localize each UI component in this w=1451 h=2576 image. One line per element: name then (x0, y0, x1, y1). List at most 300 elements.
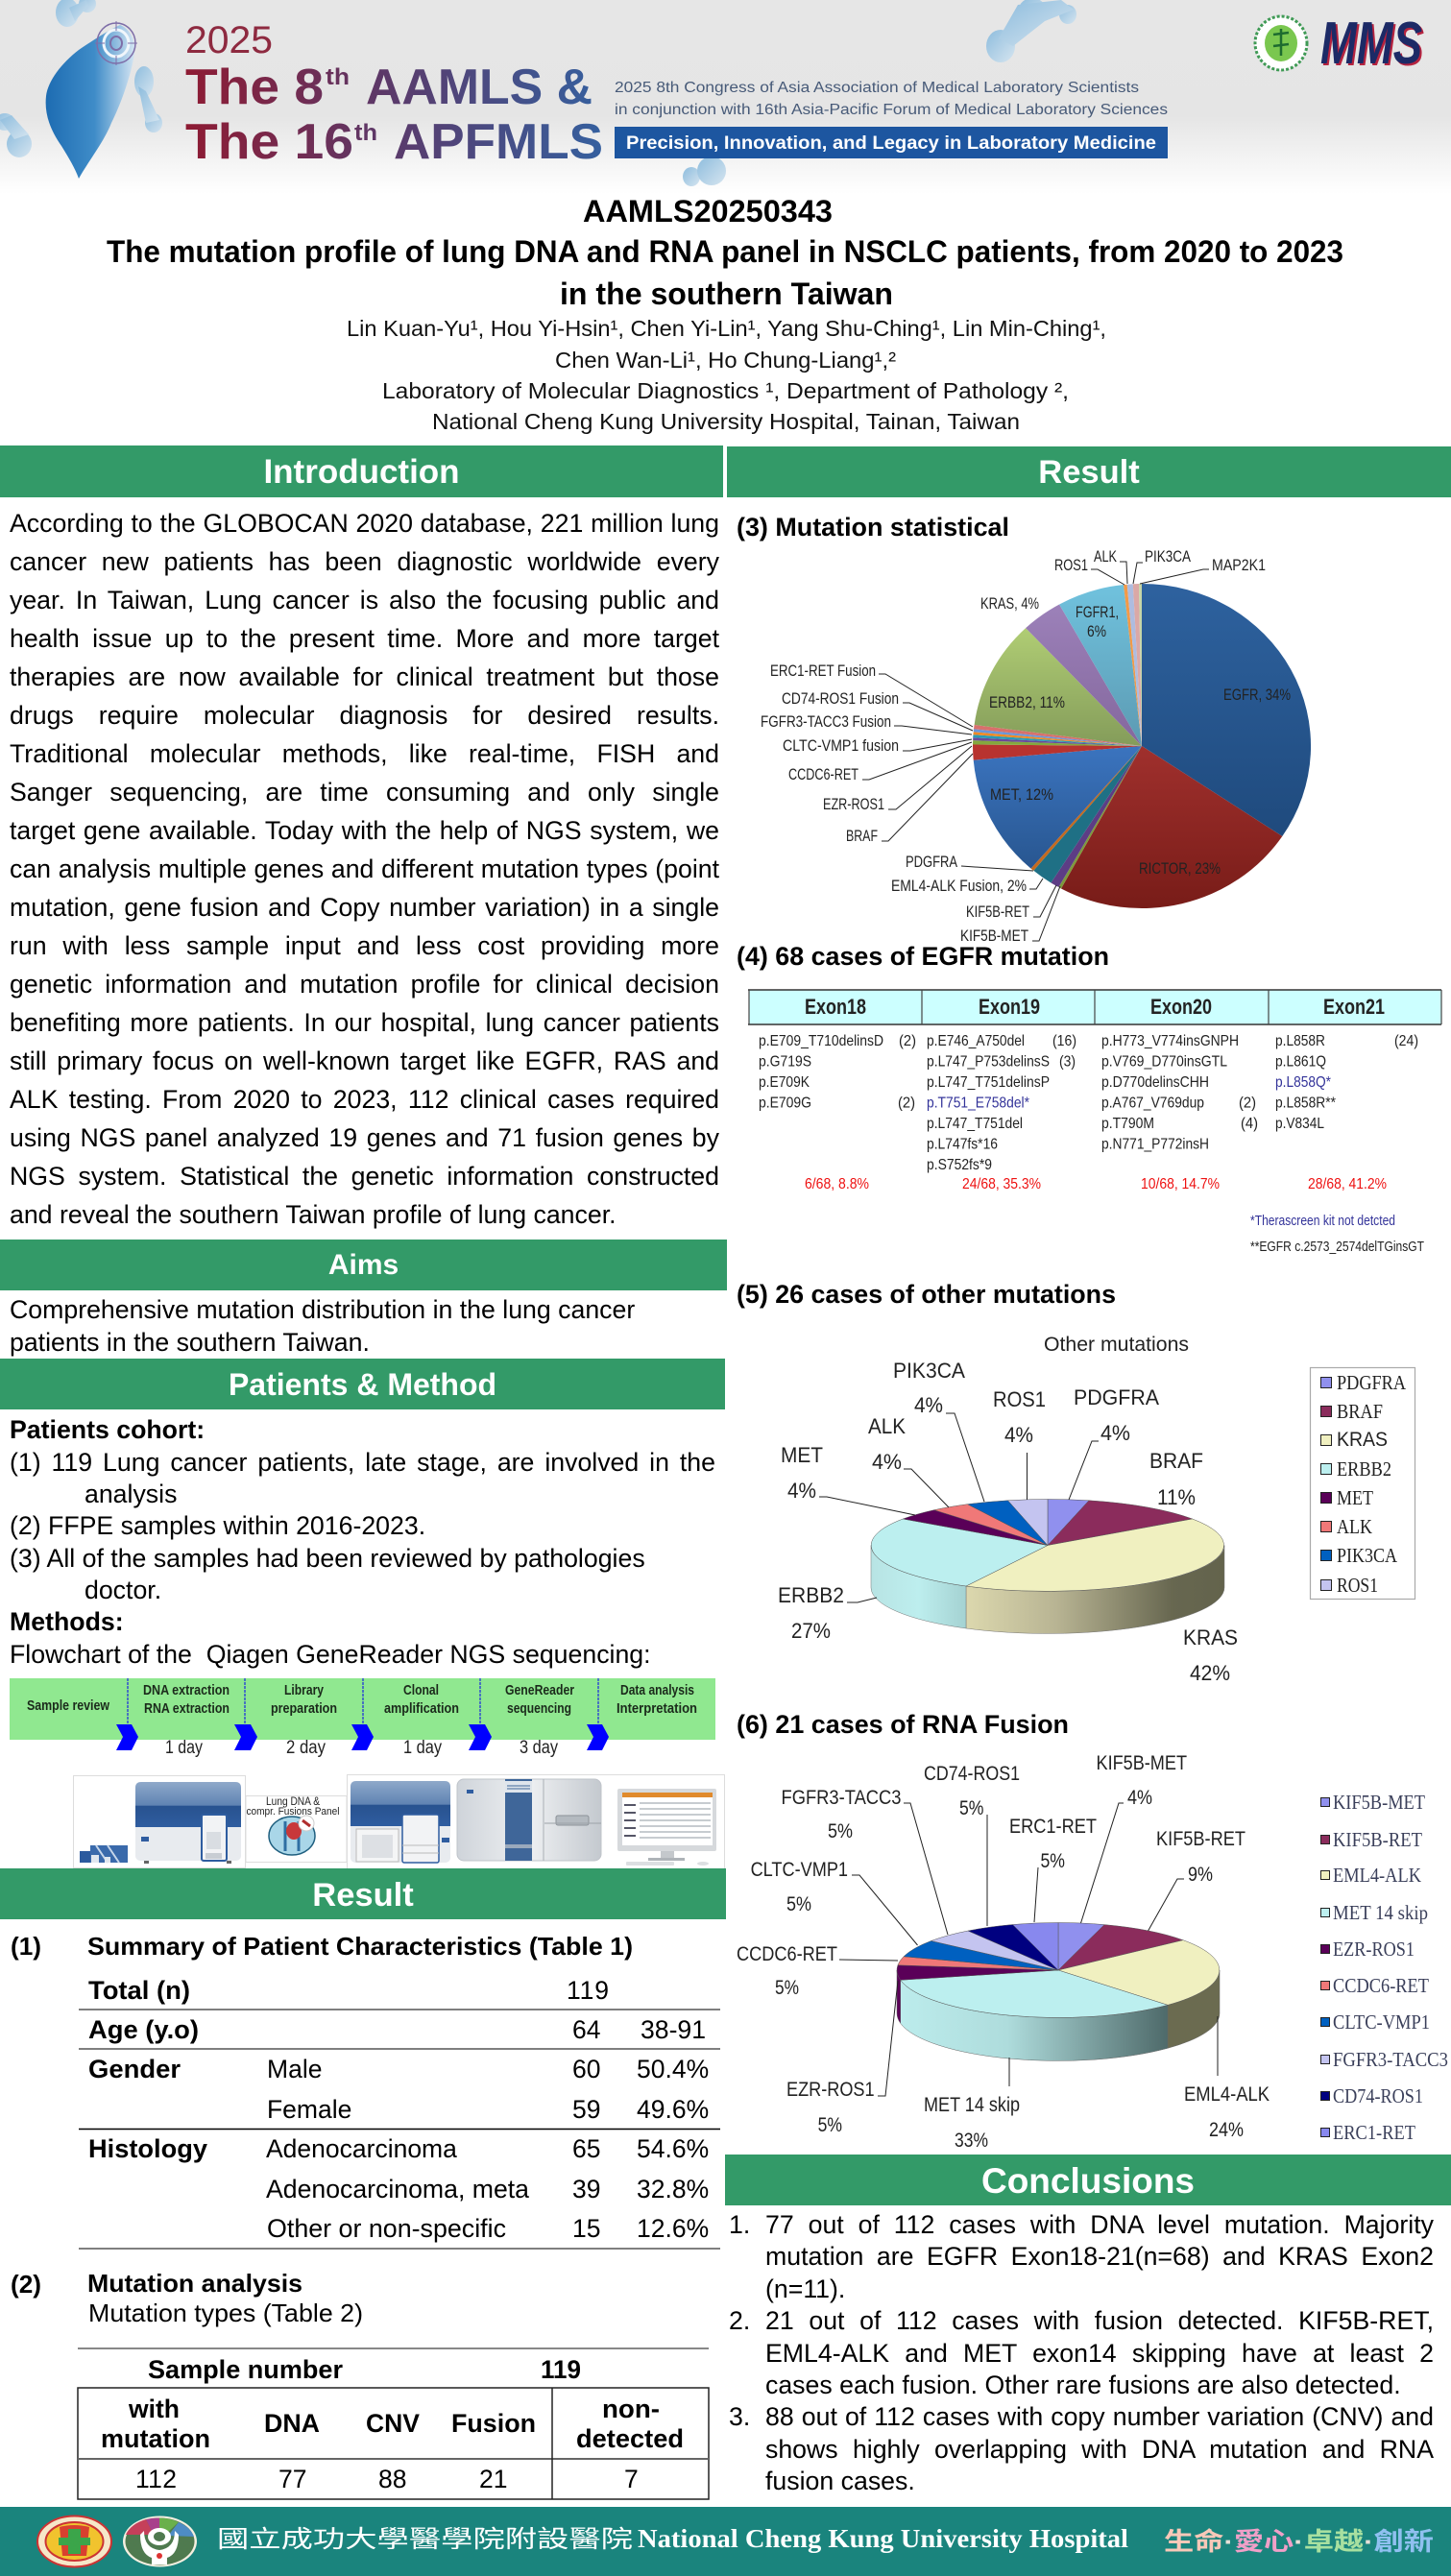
icon: society logo (1255, 16, 1307, 70)
legend: ALK (1337, 1515, 1372, 1538)
exon 19 variants: p.L747_T751delinsP (927, 1074, 1050, 1091)
table 1: patient characteristics: Gender (88, 2055, 181, 2083)
flowchart step labels: amplification (384, 1700, 459, 1717)
text block: patients cohort and methods: (3) All of the samples had been reviewed by pathologies (10, 1544, 645, 1573)
pie labels: ERBB2, 11% (989, 693, 1065, 711)
legend: PDGFRA (1337, 1371, 1407, 1394)
text block: introduction paragraph: run with less sample input and less cost providing more (10, 931, 719, 960)
heading: Patients & Method (0, 1359, 725, 1409)
text block: introduction paragraph: using NGS panel analyzed 19 genes and 71 fusion genes by (10, 1123, 719, 1152)
table 1: patient characteristics (79, 1976, 720, 2249)
pie labels (761, 547, 1291, 945)
conference title (185, 60, 603, 170)
table 2: mutation types: 7 (624, 2465, 639, 2493)
table 2: mutation types: Fusion (451, 2409, 536, 2438)
text block: conclusions list: mutation are EGFR Exon18-21(n=68) and KRAS Exon2 (765, 2242, 1434, 2271)
text block: conclusions list: fusion cases. (765, 2467, 915, 2495)
table 1: patient characteristics: Adenocarcinoma (266, 2134, 457, 2163)
text block: conclusions list: 21 out of 112 cases with fusion detected. KIF5B-RET, (765, 2306, 1434, 2335)
flowchart step labels: Sample review (27, 1697, 109, 1714)
text block: aims: patients in the southern Taiwan. (10, 1328, 370, 1357)
slogan bar: Precision, Innovation, and Legacy in Laboratory Medicine (626, 133, 1156, 154)
pie labels: BRAF (846, 827, 878, 845)
text block: introduction paragraph: therapies are now available for clinical treatment but those (10, 662, 719, 691)
exon totals: 10/68, 14.7% (1141, 1176, 1220, 1192)
legend: KIF5B-RET (1333, 1828, 1422, 1851)
exon 19 variants: p.L747fs*16 (927, 1137, 998, 1152)
table 1: patient characteristics: 49.6% (637, 2095, 709, 2124)
panel: result, right column heading: Result (1038, 454, 1140, 491)
text block: introduction paragraph: ALK testing. From 2020 to 2023, 112 clinical cases required (10, 1085, 719, 1114)
panel: conclusions (725, 2155, 1451, 2495)
chart: RNA fusion 3D pie (737, 1710, 1448, 2152)
chart: other mutations 3D pie (737, 1282, 1415, 1685)
pie labels: PIK3CA (893, 1359, 965, 1383)
table 2: mutation types (78, 2348, 709, 2499)
icon: QIAcube with loading station (351, 1781, 450, 1863)
pie slices (871, 1499, 1224, 1591)
leader lines (839, 1803, 1218, 2096)
table footnotes (1250, 1213, 1424, 1255)
table 1: patient characteristics: Total (n) (88, 1976, 190, 2005)
exon 18 variants: p.E709K (759, 1074, 810, 1091)
equipment image strip (73, 1774, 725, 1868)
text block: conclusions list: 88 out of 112 cases with copy number variation (CNV) and (765, 2402, 1434, 2431)
exon 19 variants: (3) (1059, 1054, 1076, 1070)
abstract number: AAMLS20250343 (583, 194, 833, 229)
flowchart step labels: Clonal (403, 1682, 439, 1698)
pie labels: KIF5B-RET (966, 903, 1029, 921)
exon 20 variants: p.T790M (1101, 1116, 1154, 1132)
exon 20 variants: p.A767_V769dup (1101, 1095, 1204, 1112)
section heading 2 (11, 2269, 363, 2327)
conference title: The 8 (185, 60, 324, 115)
pie labels: CD74-ROS1 Fusion (782, 689, 899, 708)
legend: ERC1-RET (1333, 2121, 1415, 2144)
table 1: patient characteristics: 50.4% (637, 2055, 709, 2083)
section heading 2: Mutation types (Table 2) (88, 2299, 363, 2327)
heading: (3) Mutation statistical: (3) Mutation statistical (737, 513, 1009, 542)
panel: patients and method (0, 1359, 725, 1669)
exon totals (805, 1176, 1387, 1192)
pie labels: 6% (1087, 622, 1106, 640)
table 1: patient characteristics: 54.6% (637, 2134, 709, 2163)
table 2: mutation types: Sample number (148, 2355, 343, 2384)
heading: Result (0, 1868, 726, 1919)
exon 18 variants: (2) (899, 1033, 916, 1049)
exon header row: Exon21 (1323, 995, 1385, 1019)
pie labels: 5% (775, 1977, 799, 1999)
text block: patients cohort and methods: doctor. (85, 1576, 161, 1604)
flowchart (10, 1678, 715, 1757)
text block: introduction paragraph: genetic information and mutation profile for clinical decision (10, 970, 719, 999)
section heading 2: Mutation analysis (87, 2269, 302, 2298)
table 1: patient characteristics: 59 (572, 2095, 600, 2124)
table 2: mutation types: CNV (366, 2409, 420, 2438)
pie labels: 5% (1041, 1850, 1065, 1872)
panel: result, right column heading (727, 446, 1451, 497)
pie labels: 11% (1157, 1485, 1196, 1509)
conference banner (0, 0, 1451, 186)
pie labels: CLTC-VMP1 fusion (783, 736, 899, 755)
pie labels: ALK (868, 1414, 906, 1438)
legend: ERBB2 (1337, 1457, 1391, 1481)
table 2: mutation types: 77 (278, 2465, 306, 2493)
text block: introduction paragraph: Sanger sequencing, are time consuming and only single (10, 778, 719, 807)
arrows: process chevrons (116, 1724, 609, 1750)
text block: conclusions list: 1. (729, 2210, 750, 2239)
authors and affiliations (347, 316, 1106, 434)
pie labels: PIK3CA (1145, 547, 1192, 566)
pie labels: ERBB2 (778, 1583, 844, 1607)
legend: CCDC6-RET (1333, 1974, 1429, 1997)
pie labels: KIF5B-RET (1156, 1828, 1245, 1850)
table 1: patient characteristics: Histology (88, 2134, 207, 2163)
table footnotes: *Therascreen kit not detcted (1250, 1213, 1395, 1229)
text block: introduction paragraph: benefiting more patients. In our hospital, lung cancer patients (10, 1008, 719, 1037)
authors and affiliations: Chen Wan-Li¹, Ho Chung-Liang¹,² (555, 348, 896, 373)
year: 2025 (185, 19, 273, 61)
legend: BRAF (1337, 1400, 1383, 1423)
table 1: patient characteristics: Female (267, 2095, 351, 2124)
exon 21 variants: p.L861Q (1275, 1054, 1326, 1070)
table 1: patient characteristics: Age (y.o) (88, 2015, 199, 2044)
pie side walls (897, 1970, 1220, 2060)
table: EGFR mutation by exon (737, 943, 1442, 1255)
icon: hospital values logo (123, 2516, 197, 2567)
exon header row: Exon20 (1150, 995, 1212, 1019)
section heading 1: Summary of Patient Characteristics (Table 1) (87, 1932, 633, 1961)
exon 19 variants: p.T751_E758del* (927, 1095, 1029, 1112)
icon: GeneReader instrument (457, 1779, 601, 1861)
pie labels: 4% (1127, 1787, 1152, 1809)
exon 18 variants: p.E709_T710delinsD (759, 1033, 883, 1049)
text block: introduction paragraph: Traditional molecular methods, like real-time, FISH and (10, 739, 719, 768)
table 1: patient characteristics: Male (267, 2055, 322, 2083)
exon 19 variants: p.E746_A750del (927, 1033, 1025, 1049)
poster title: The mutation profile of lung DNA and RNA panel in NSCLC patients, from 2020 to 2023 (107, 234, 1343, 269)
heading: Introduction (0, 445, 723, 497)
pie labels: EZR-ROS1 (823, 795, 884, 813)
legend (1310, 1367, 1415, 1600)
legend: CLTC-VMP1 (1333, 2010, 1430, 2034)
pie slices (897, 1922, 1220, 2017)
flowchart step labels (27, 1682, 697, 1717)
leader lines (819, 1413, 1099, 1602)
pie labels: EZR-ROS1 (786, 2079, 875, 2101)
heading: Result: Result (312, 1877, 414, 1914)
flowchart step labels: Data analysis (620, 1682, 694, 1698)
pie labels (778, 1359, 1238, 1685)
table 1: patient characteristics: 60 (572, 2055, 600, 2083)
flowchart step labels: DNA extraction (143, 1682, 230, 1698)
exon 20 variants: p.H773_V774insGNPH (1101, 1033, 1239, 1049)
text block: introduction paragraph: year. In Taiwan, Lung cancer is also the focusing public and (10, 586, 719, 614)
pie labels: MET 14 skip (924, 2094, 1020, 2116)
legend: KIF5B-MET (1333, 1791, 1425, 1814)
pie labels: PDGFRA (906, 853, 958, 871)
table 2: mutation types: detected (576, 2424, 684, 2453)
pie labels: 5% (818, 2114, 842, 2136)
text block: conclusions list: EML4-ALK and MET exon14 skipping have at least 2 (765, 2339, 1434, 2368)
text block: conclusions list: 2. (729, 2306, 750, 2335)
pie labels: 4% (1100, 1421, 1130, 1445)
chart title: Other mutations (1044, 1334, 1189, 1356)
heading: Aims (0, 1240, 727, 1290)
exon header row (748, 990, 1441, 1024)
icon: lung panel: compr. Fusions Panel (246, 1806, 340, 1818)
text block: conclusions list: (n=11). (765, 2275, 845, 2303)
pie labels: PDGFRA (1074, 1385, 1159, 1409)
pie labels: ROS1 (1054, 556, 1088, 574)
pie labels: 4% (914, 1393, 943, 1417)
legend: EZR-ROS1 (1333, 1938, 1415, 1961)
text block: introduction paragraph (10, 509, 719, 1229)
exon 21 variants: p.L858R (1275, 1033, 1325, 1049)
table 1: patient characteristics: 64 (572, 2015, 600, 2044)
congress subtitle (615, 80, 1168, 118)
icon: hospital seal (37, 2516, 111, 2567)
hospital motto: 生命 ·愛心 ·卓越 ·創新 (1164, 2527, 1434, 2556)
legend: KRAS (1337, 1429, 1388, 1451)
text block: patients cohort and methods: (1) 119 Lung cancer patients, late stage, are involved in the (10, 1448, 715, 1477)
table 2: mutation types: with (128, 2395, 180, 2423)
hospital name: National Cheng Kung University Hospital (638, 2524, 1129, 2553)
text block: conclusions list: 3. (729, 2402, 750, 2431)
table 1: patient characteristics: 12.6% (637, 2214, 709, 2243)
text block: conclusions list: cases each fusion. Other rare fusions are also detected. (765, 2371, 1401, 2399)
pie labels: 42% (1190, 1661, 1230, 1685)
icon: target on Taiwan (95, 21, 137, 65)
conference title: th (354, 120, 377, 146)
legend: PIK3CA (1337, 1544, 1398, 1567)
text block: introduction paragraph: According to the GLOBOCAN 2020 database, 221 million lung (10, 509, 719, 538)
text block: patients cohort and methods: Flowchart of the Qiagen GeneReader NGS sequencing: (10, 1640, 651, 1669)
exon 21 variants: p.L858R** (1275, 1095, 1336, 1112)
authors and affiliations: National Cheng Kung University Hospital, Tainan, Taiwan (432, 409, 1020, 434)
exon header row: Exon18 (805, 995, 866, 1019)
leader lines (862, 562, 1209, 941)
text block: introduction paragraph: NGS system. Statistical the genetic information constructed (10, 1162, 719, 1191)
pie labels: MET, 12% (990, 785, 1053, 804)
footer band (0, 2507, 1451, 2576)
pie labels: FGFR3-TACC3 Fusion (761, 712, 891, 731)
heading: Conclusions (725, 2155, 1451, 2205)
text block: introduction paragraph: target gene available. Today with the help of NGS system, we (10, 816, 719, 845)
pie labels: 9% (1188, 1864, 1213, 1886)
table 2: mutation types: 88 (378, 2465, 406, 2493)
pie labels: ERC1-RET Fusion (770, 662, 876, 680)
table 2: mutation types: 119 (541, 2355, 581, 2384)
chart: mutation statistical pie (737, 513, 1312, 945)
congress subtitle: in conjunction with 16th Asia-Pacific Forum of Medical Laboratory Sciences (615, 102, 1168, 118)
text block: introduction paragraph: drugs require molecular diagnosis for desired results. (10, 701, 719, 730)
exon 19 variants: p.L747_T751del (927, 1116, 1023, 1132)
exon header row: Exon19 (979, 995, 1040, 1019)
heading: Aims: Aims (328, 1249, 399, 1281)
pie labels: BRAF (1149, 1449, 1203, 1473)
icon: reagent kits (80, 1845, 128, 1863)
icon: analysis workstation monitor (617, 1789, 716, 1866)
molecule decorations (0, 0, 1076, 186)
pie labels: 24% (1209, 2119, 1244, 2141)
legend (1321, 1791, 1448, 2144)
pie labels: CD74-ROS1 (924, 1763, 1020, 1785)
pie labels: CCDC6-RET (737, 1943, 837, 1965)
text block: conclusions list: shows highly overlapping with DNA mutation and RNA (765, 2435, 1434, 2464)
poster title: in the southern Taiwan (560, 277, 893, 311)
conference title: th (326, 64, 350, 90)
pie labels: ERC1-RET (1009, 1816, 1097, 1838)
text block: patients cohort and methods: Patients cohort: (10, 1415, 205, 1444)
table 1: patient characteristics: 32.8% (637, 2175, 709, 2203)
exon 18 variants: p.G719S (759, 1054, 811, 1070)
pie labels: 5% (828, 1820, 853, 1842)
text block: patients cohort and methods: Methods: (10, 1607, 124, 1636)
flowchart step labels: Library (284, 1682, 325, 1698)
pie labels: CLTC-VMP1 (751, 1859, 848, 1881)
exon 18 variants (759, 1033, 916, 1112)
text block: introduction paragraph: can analysis multiple genes and different mutation types (point (10, 855, 719, 883)
exon 21 variants (1275, 1033, 1418, 1132)
pie labels: EGFR, 34% (1223, 686, 1291, 704)
text block: patients cohort and methods: (2) FFPE samples within 2016-2023. (10, 1511, 425, 1540)
pie labels: KIF5B-MET (960, 927, 1028, 945)
flowchart step labels: RNA extraction (144, 1700, 230, 1717)
heading: Conclusions: Conclusions (981, 2161, 1195, 2201)
congress subtitle: 2025 8th Congress of Asia Association of Medical Laboratory Scientists (615, 80, 1139, 96)
conference title: APFMLS (394, 114, 603, 170)
flowchart step labels: sequencing (507, 1700, 571, 1717)
panel: result, patient characteristics and mutation types (0, 1868, 726, 2500)
authors and affiliations: Laboratory of Molecular Diagnostics ¹, Department of Pathology ², (382, 378, 1069, 403)
table 2: mutation types: mutation (101, 2424, 210, 2453)
pie labels: KRAS (1183, 1625, 1238, 1649)
exon totals: 28/68, 41.2% (1308, 1176, 1387, 1192)
pie labels: FGFR3-TACC3 (782, 1787, 901, 1809)
pie labels (737, 1752, 1270, 2152)
icon: lung panel: Lung DNA & (266, 1794, 320, 1808)
exon 21 variants: (24) (1394, 1033, 1418, 1049)
flowchart step labels: preparation (271, 1700, 337, 1717)
conference title: The 16 (185, 114, 353, 170)
text block: conclusions list: 77 out of 112 cases with DNA level mutation. Majority (765, 2210, 1434, 2239)
text block: patients cohort and methods: analysis (85, 1480, 177, 1508)
icon: Taiwan island (46, 25, 134, 179)
exon 20 variants: p.V769_D770insGTL (1101, 1054, 1227, 1070)
exon 20 variants: p.N771_P772insH (1101, 1137, 1209, 1152)
exon 21 variants: p.V834L (1275, 1116, 1324, 1132)
exon 20 variants: p.D770delinsCHH (1101, 1074, 1209, 1091)
flowchart step labels: Interpretation (617, 1700, 697, 1717)
exon totals: 6/68, 8.8% (805, 1176, 869, 1192)
heading: Introduction: Introduction (263, 453, 460, 491)
table 1: patient characteristics: Adenocarcinoma, meta (266, 2175, 529, 2203)
flowchart step labels: GeneReader (505, 1682, 574, 1698)
pie labels: MET (781, 1443, 823, 1467)
table 2: mutation types: DNA (264, 2409, 320, 2438)
exon 18 variants: (2) (898, 1095, 915, 1112)
pie labels: 27% (791, 1619, 831, 1643)
exon 20 variants (1101, 1033, 1258, 1152)
exon 20 variants: (2) (1239, 1095, 1256, 1112)
text block: aims: Comprehensive mutation distribution in the lung cancer (10, 1295, 635, 1324)
text block: conclusions list (729, 2210, 1434, 2495)
exon 19 variants: p.S752fs*9 (927, 1157, 992, 1173)
heading: Patients & Method: Patients & Method (229, 1367, 496, 1402)
exon 19 variants: (16) (1052, 1033, 1076, 1049)
hospital name: 國立成功大學醫學院附設醫院 (217, 2526, 633, 2553)
panel: introduction (0, 445, 723, 1229)
legend: CD74-ROS1 (1333, 2084, 1423, 2107)
pie labels: CCDC6-RET (788, 765, 859, 783)
exon totals: 24/68, 35.3% (962, 1176, 1041, 1192)
exon 19 variants (927, 1033, 1076, 1173)
pie labels: MAP2K1 (1212, 556, 1266, 574)
text block: introduction paragraph: mutation, gene fusion and Copy number variation) in a single (10, 893, 719, 922)
table 2: mutation types: 21 (479, 2465, 507, 2493)
pie labels: ALK (1094, 547, 1117, 566)
pie labels: KIF5B-MET (1097, 1752, 1187, 1774)
pie labels: 5% (959, 1797, 983, 1819)
pie labels: 4% (1004, 1423, 1033, 1447)
legend: EML4-ALK (1333, 1864, 1421, 1887)
heading: (6) 21 cases of RNA Fusion: (6) 21 cases of RNA Fusion (737, 1710, 1069, 1739)
poster title (107, 234, 1343, 311)
legend: MET 14 skip (1333, 1901, 1428, 1924)
icon: QIAcube instrument (135, 1782, 241, 1864)
text block: patients cohort and methods (10, 1415, 715, 1669)
text block: introduction paragraph: cancer new patients has been diagnostic worldwide every (10, 547, 719, 576)
panel: aims (0, 1240, 727, 1357)
table 1: patient characteristics: 65 (572, 2134, 600, 2163)
flowchart durations (165, 1738, 558, 1758)
pie labels: RICTOR, 23% (1139, 859, 1221, 878)
pie side walls (871, 1546, 1224, 1633)
table 2: mutation types: 112 (135, 2465, 177, 2493)
icon: lung panel (246, 1794, 340, 1855)
pie labels: 4% (787, 1479, 816, 1503)
legend: ROS1 (1337, 1574, 1378, 1597)
section heading 2: (2) (11, 2270, 41, 2299)
table 1: patient characteristics: 15 (572, 2214, 600, 2243)
table 1: patient characteristics: 38-91 (641, 2015, 706, 2044)
hospital name (217, 2524, 1129, 2553)
pie labels: 33% (955, 2130, 988, 2152)
text block: introduction paragraph: still primary focus on well-known target like EGFR, RAS and (10, 1047, 719, 1075)
table 1: patient characteristics: 39 (572, 2175, 600, 2203)
pie slices (973, 584, 1311, 908)
pie labels: EML4-ALK Fusion, 2% (891, 877, 1027, 895)
pie labels: EML4-ALK (1184, 2083, 1270, 2106)
exon 20 variants: (4) (1241, 1116, 1258, 1132)
slogan bar (615, 127, 1168, 158)
text block: introduction paragraph: and reveal the southern Taiwan profile of lung cancer. (10, 1200, 617, 1229)
exon 21 variants: p.L858Q* (1275, 1074, 1331, 1091)
authors and affiliations: Lin Kuan-Yu¹, Hou Yi-Hsin¹, Chen Yi-Lin¹, Yang Shu-Ching¹, Lin Min-Ching¹, (347, 316, 1106, 341)
pie labels: 4% (872, 1450, 902, 1474)
text block: introduction paragraph: health issue up to the present time. More and more target (10, 624, 719, 653)
pie labels: 5% (786, 1893, 811, 1915)
table 2: mutation types: non- (602, 2395, 660, 2423)
pie labels: KRAS, 4% (980, 594, 1039, 613)
exon 19 variants: p.L747_P753delinsS (927, 1054, 1050, 1070)
legend: MET (1337, 1486, 1373, 1509)
text block: aims (10, 1295, 635, 1357)
section heading 1: (1) (11, 1932, 41, 1961)
exon 18 variants: p.E709G (759, 1095, 811, 1112)
table 1: patient characteristics: Other or non-specific (267, 2214, 506, 2243)
